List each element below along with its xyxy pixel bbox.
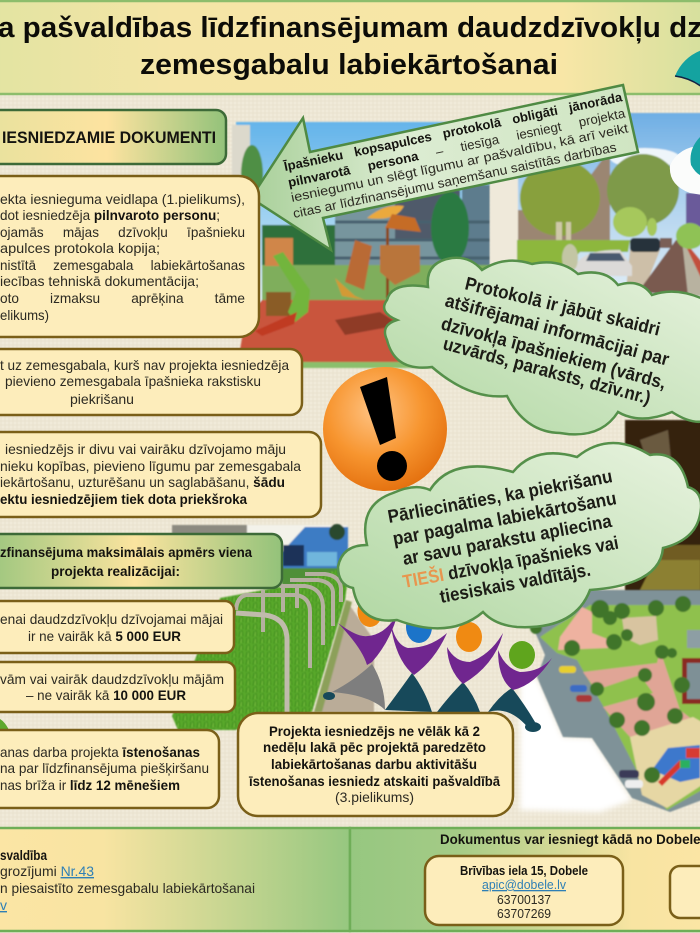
panel: report to municipality: (3.pielikums) [335,789,414,805]
footer panel: municipality regulations: v [0,897,7,913]
panel: documents list: dot iesniedzēja pilnvaroto personu; [0,207,220,223]
panel: documents list: iecības tehniskā dokumentācija; [0,273,199,289]
heading: maximum co-financing: projekta realizācijai: [51,563,180,579]
illustration: people holding hands [323,595,552,732]
head: orange [358,595,382,627]
header band with title [0,1,700,94]
panel: priority for joint applicants: iekārtošanu, uzturēšanu un saglabāšanu, šādu [0,474,285,490]
panel: documents list [0,176,259,337]
title [0,12,700,81]
footer panel: municipality regulations: svaldība [0,847,47,863]
arrow text: pilnvarotā persona – tiesīga iesniegt projekta [287,105,627,190]
panel: priority for joint applicants: ektu iesniedzējiem tiek dota priekšroka [0,491,247,507]
callout arrow: authorised person [251,85,638,250]
heading: maximum co-financing [0,534,282,588]
arrow text: iesniegumu un slēgt līgumu ar pašvaldību, kā arī veikt [290,120,630,205]
panel: implementation period: anas darba projekta īstenošanas [0,744,200,760]
cloud text: dzīvokļa īpašniekiem (vārds, [439,313,668,393]
cloud text: uzvārds, paraksts, dzīv.nr.) [441,333,653,408]
head: blue [406,611,432,643]
photo: aerial view of landscaped yard [520,590,700,812]
contact box: Dobele: Brīvības iela 15, Dobele [460,863,588,878]
cloud text: Protokolā ir jābūt skaidri [463,272,662,340]
panel: documents list: nistītā zemesgabala labiekārtošanas [0,257,245,273]
panel: 5 000 EUR limit: enai daudzdzīvokļu dzīvojamai mājai [0,611,223,627]
cloud text: par pagalma labiekārtošanu [391,487,618,549]
title: zemesgabalu labiekārtošanai [140,49,558,81]
cloud text: TIEŠI dzīvokļa īpašnieks vai [401,532,620,592]
contact box: cropped [670,866,700,918]
footer panel: municipality regulations: n piesaistīto zemesgabalu labiekārtošanai [0,880,255,896]
panel: 10 000 EUR limit [0,662,235,712]
panel: 5 000 EUR limit [0,601,234,653]
title: a pašvaldības līdzfinansējumam daudzdzīvokļu dz [0,12,700,44]
cloud text: Pārliecināties, ka piekrišanu [386,465,614,527]
cloud text: tiesiskais valdītājs. [438,559,592,607]
arrow text: Īpašnieku kopsapulces protokolā obligāti jānorāda [282,89,624,174]
panel: implementation period [0,730,219,808]
footer panel: where to submit [350,828,700,931]
heading: documents to submit: IESNIEDZAMIE DOKUMENTI [2,128,216,147]
panel: documents list: oto izmaksu aprēķina tāme [0,290,245,306]
panel: priority for joint applicants: nieku kopības, pievieno līgumu par zemesgabala [0,458,301,474]
panel: land owner consent: piekrišanu [70,391,134,407]
arrow text: citas ar līdzfinansējumu saņemšanu saistītās darbības [292,139,618,221]
photo: playground [232,122,495,368]
panel: priority for joint applicants [0,432,321,517]
contact box: Dobele [425,856,623,925]
cloud text: ar savu parakstu apliecina [401,510,614,569]
panel: report to municipality: īstenošanas iesniedz atskaiti pašvaldībā [248,773,500,789]
heading: maximum co-financing: zfinansējuma maksimālais apmērs viena [0,544,252,560]
panel: priority for joint applicants: iesniedzējs ir divu vai vairāku dzīvojamo māju [5,441,286,457]
panel: documents list: ojamās mājas dzīvokļu īpašnieku [0,224,245,240]
panel: land owner consent [0,349,302,415]
head: orange [456,622,482,652]
exclamation mark [360,377,407,481]
panel: report to municipality [238,713,513,816]
panel: report to municipality: labiekārtošanas darbu aktivitāšu [271,756,477,772]
photo: dark interior [625,420,700,592]
head: green [509,641,535,669]
panel: 5 000 EUR limit: ir ne vairāk kā 5 000 EUR [28,628,181,644]
photo: street with trees [490,113,700,303]
heading: documents to submit [0,110,226,164]
cloud callout: consent signature [338,443,700,628]
contact box: Dobele: 63707269 [497,906,551,921]
panel: land owner consent: pievieno zemesgabala īpašnieka rakstisku [5,373,261,389]
panel: implementation period: nas brīža ir līdz 12 mēnešiem [0,777,180,793]
panel: implementation period: na par līdzfinansējuma piešķiršanu [0,760,209,776]
bike racks [236,574,341,712]
icon: orange exclamation orb [323,367,447,491]
panel: 10 000 EUR limit: – ne vairāk kā 10 000 EUR [26,687,186,703]
panel: report to municipality: Projekta iesniedzējs ne vēlāk kā 2 [269,723,480,739]
icon: white cloud with teal shape [670,135,700,195]
arrow text [282,89,630,221]
panel: 10 000 EUR limit: vām vai vairāk daudzdzīvokļu mājām [0,671,224,687]
panel: report to municipality: nedēļu lakā pēc projektā paredzēto [263,739,486,755]
panel: land owner consent: t uz zemesgabala, kurš nav projekta iesniedzēja [0,357,289,373]
footer panel: municipality regulations [0,828,350,931]
footer panel: municipality regulations: grozījumi Nr.43 [0,863,94,879]
cloud text [386,465,620,607]
panel: documents list: apulces protokola kopija; [0,240,160,256]
icon: green corner [0,719,9,730]
cloud text: atšifrējamai informācijai par [443,290,672,370]
contact box: Dobele: apic@dobele.lv [482,877,566,892]
panel: documents list: ekta iesnieguma veidlapa (1.pielikums), [0,191,245,207]
cloud callout: protocol information [384,258,700,434]
photo: bike racks on grass [172,524,374,730]
panel: documents list: elikums) [0,307,49,323]
cloud text [439,272,672,408]
icon: teal umbrella top right [675,50,700,87]
contact box: Dobele: 63700137 [497,892,551,907]
